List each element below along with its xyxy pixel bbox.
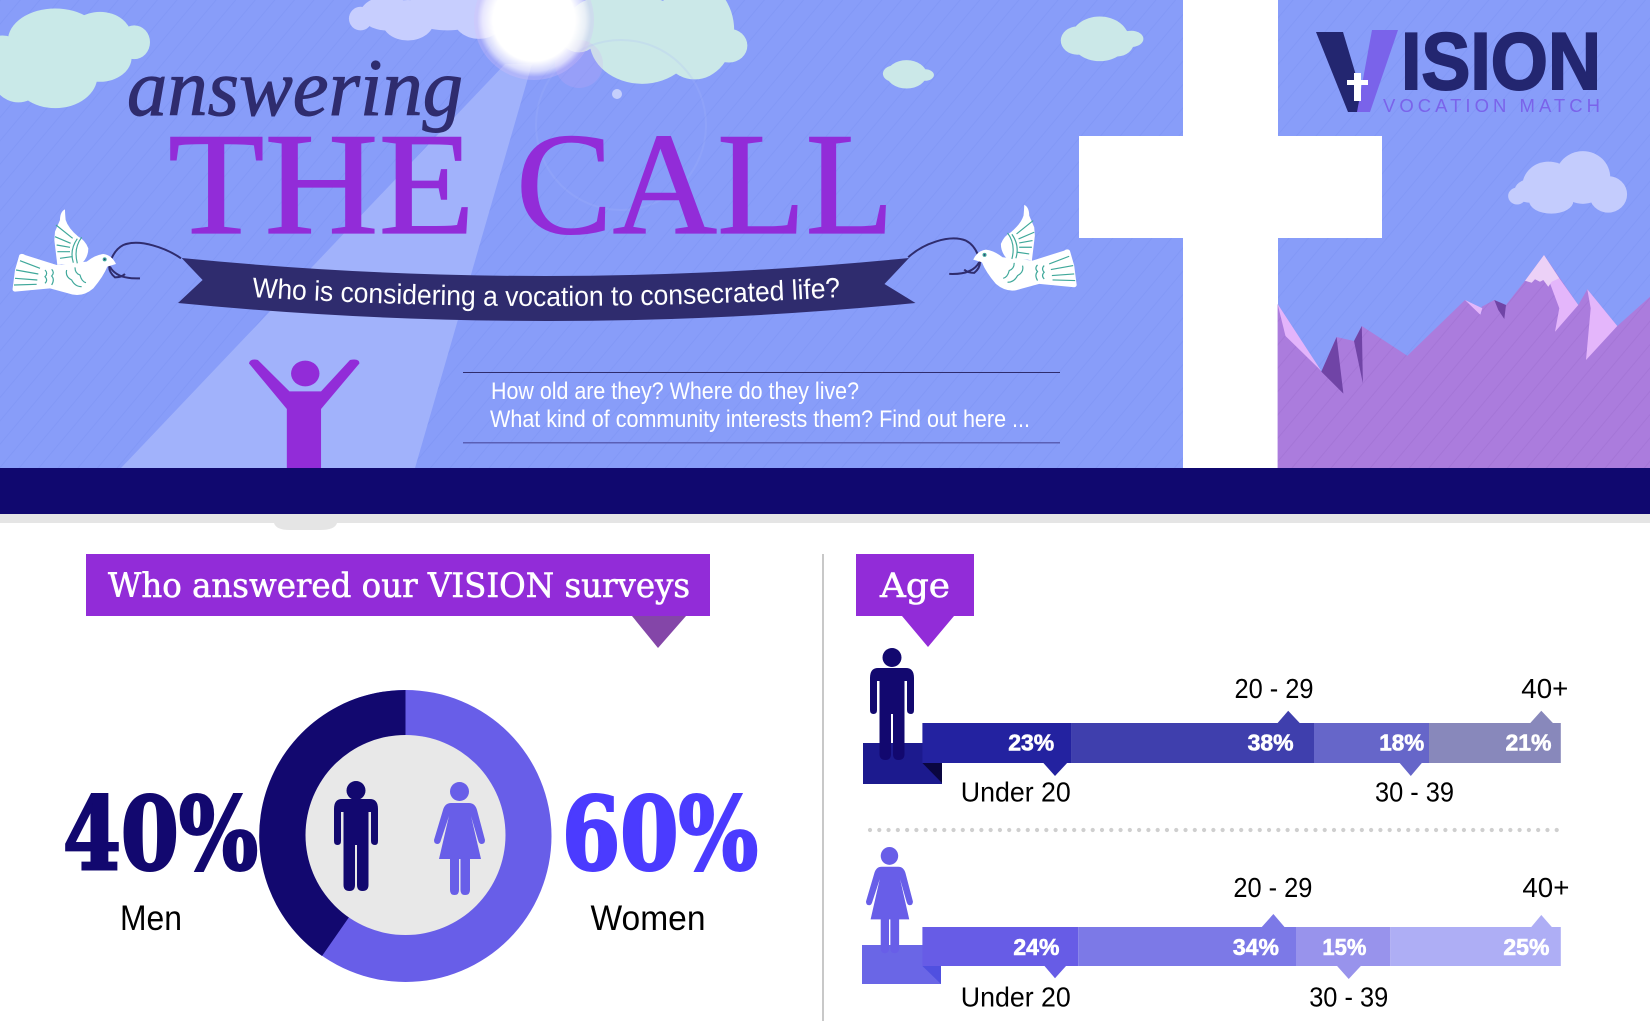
heading: age [856, 554, 974, 647]
mountains [1278, 255, 1650, 468]
heading: who answered our vision surveys [86, 554, 710, 648]
women age bar chart: 40+ [1522, 872, 1569, 903]
icon: woman in donut [434, 782, 485, 895]
stat: 60% women: Women [590, 899, 706, 938]
right dove with ribbon string [908, 205, 1077, 291]
heading: age: Age [879, 566, 950, 606]
icon: man in donut [334, 781, 378, 891]
main title: THE CALL: THE [168, 103, 475, 265]
men age bar chart: 18% [1379, 730, 1424, 756]
cloud: right teal [1061, 17, 1143, 61]
men age bar chart: 30 - 39 [1375, 777, 1454, 808]
sun with lens flare [474, 0, 706, 210]
logo: Vision Vocation Match: VOCATION MATCH [1383, 95, 1600, 116]
cloud: small teal [883, 60, 934, 89]
men age bar chart [863, 673, 1568, 808]
logo: Vision Vocation Match: ISION [1401, 17, 1601, 107]
men age bar chart: Under 20 [961, 777, 1071, 808]
dotted divider [870, 828, 1557, 832]
cloud: right lavender [1508, 151, 1627, 214]
stat: 60% women [562, 775, 758, 938]
dark navy band [0, 468, 1650, 514]
stat: 60% women: 60% [562, 775, 758, 893]
heading: who answered our vision surveys: Who answered our VISION surveys [108, 566, 690, 606]
gender donut chart [259, 690, 552, 982]
stat: 40% men: 40% [63, 775, 258, 893]
banner ribbon [178, 258, 916, 321]
men age bar chart: 40+ [1521, 673, 1568, 704]
cross [1079, 0, 1382, 468]
icon: man on bar [870, 648, 914, 760]
script word: answering: answering [127, 42, 463, 133]
men age bar chart: 38% [1248, 730, 1294, 756]
left dove with ribbon string [13, 209, 181, 295]
women age bar chart: 24% [1013, 934, 1059, 960]
women age bar chart: Under 20 [961, 982, 1071, 1013]
men age bar chart: 23% [1008, 730, 1054, 756]
cloud: top left [0, 8, 150, 108]
icon: woman on bar [866, 847, 913, 953]
vertical divider [822, 554, 824, 1021]
header background [0, 0, 1650, 468]
men age bar chart: 21% [1506, 730, 1552, 756]
women age bar chart: 30 - 39 [1309, 982, 1388, 1013]
women age bar chart: 20 - 29 [1233, 872, 1312, 903]
stat: 40% men: Men [120, 899, 182, 938]
banner ribbon: Who is considering a vocation to consecrated life? [253, 278, 839, 312]
main title: THE CALL [168, 103, 894, 265]
women age bar chart: 15% [1322, 934, 1366, 960]
intro text block: What kind of community interests them? Find out here ... [490, 406, 1030, 433]
logo: Vision Vocation Match [1316, 17, 1601, 116]
men age bar chart: 20 - 29 [1234, 673, 1314, 704]
women age bar chart: 34% [1233, 934, 1279, 960]
intro text block [463, 372, 1060, 444]
main title: THE CALL: CALL [516, 103, 894, 265]
intro text block: How old are they? Where do they live? [491, 378, 859, 405]
cloud: top centre lavender [349, 0, 505, 41]
cloud: top centre teal [558, 0, 747, 84]
figure with raised arms [249, 360, 359, 468]
women age bar chart: 25% [1503, 934, 1549, 960]
women age bar chart [862, 872, 1569, 1013]
light ray from sun [121, 64, 532, 468]
stat: 40% men [63, 775, 258, 938]
grey shadow band [0, 514, 1650, 530]
